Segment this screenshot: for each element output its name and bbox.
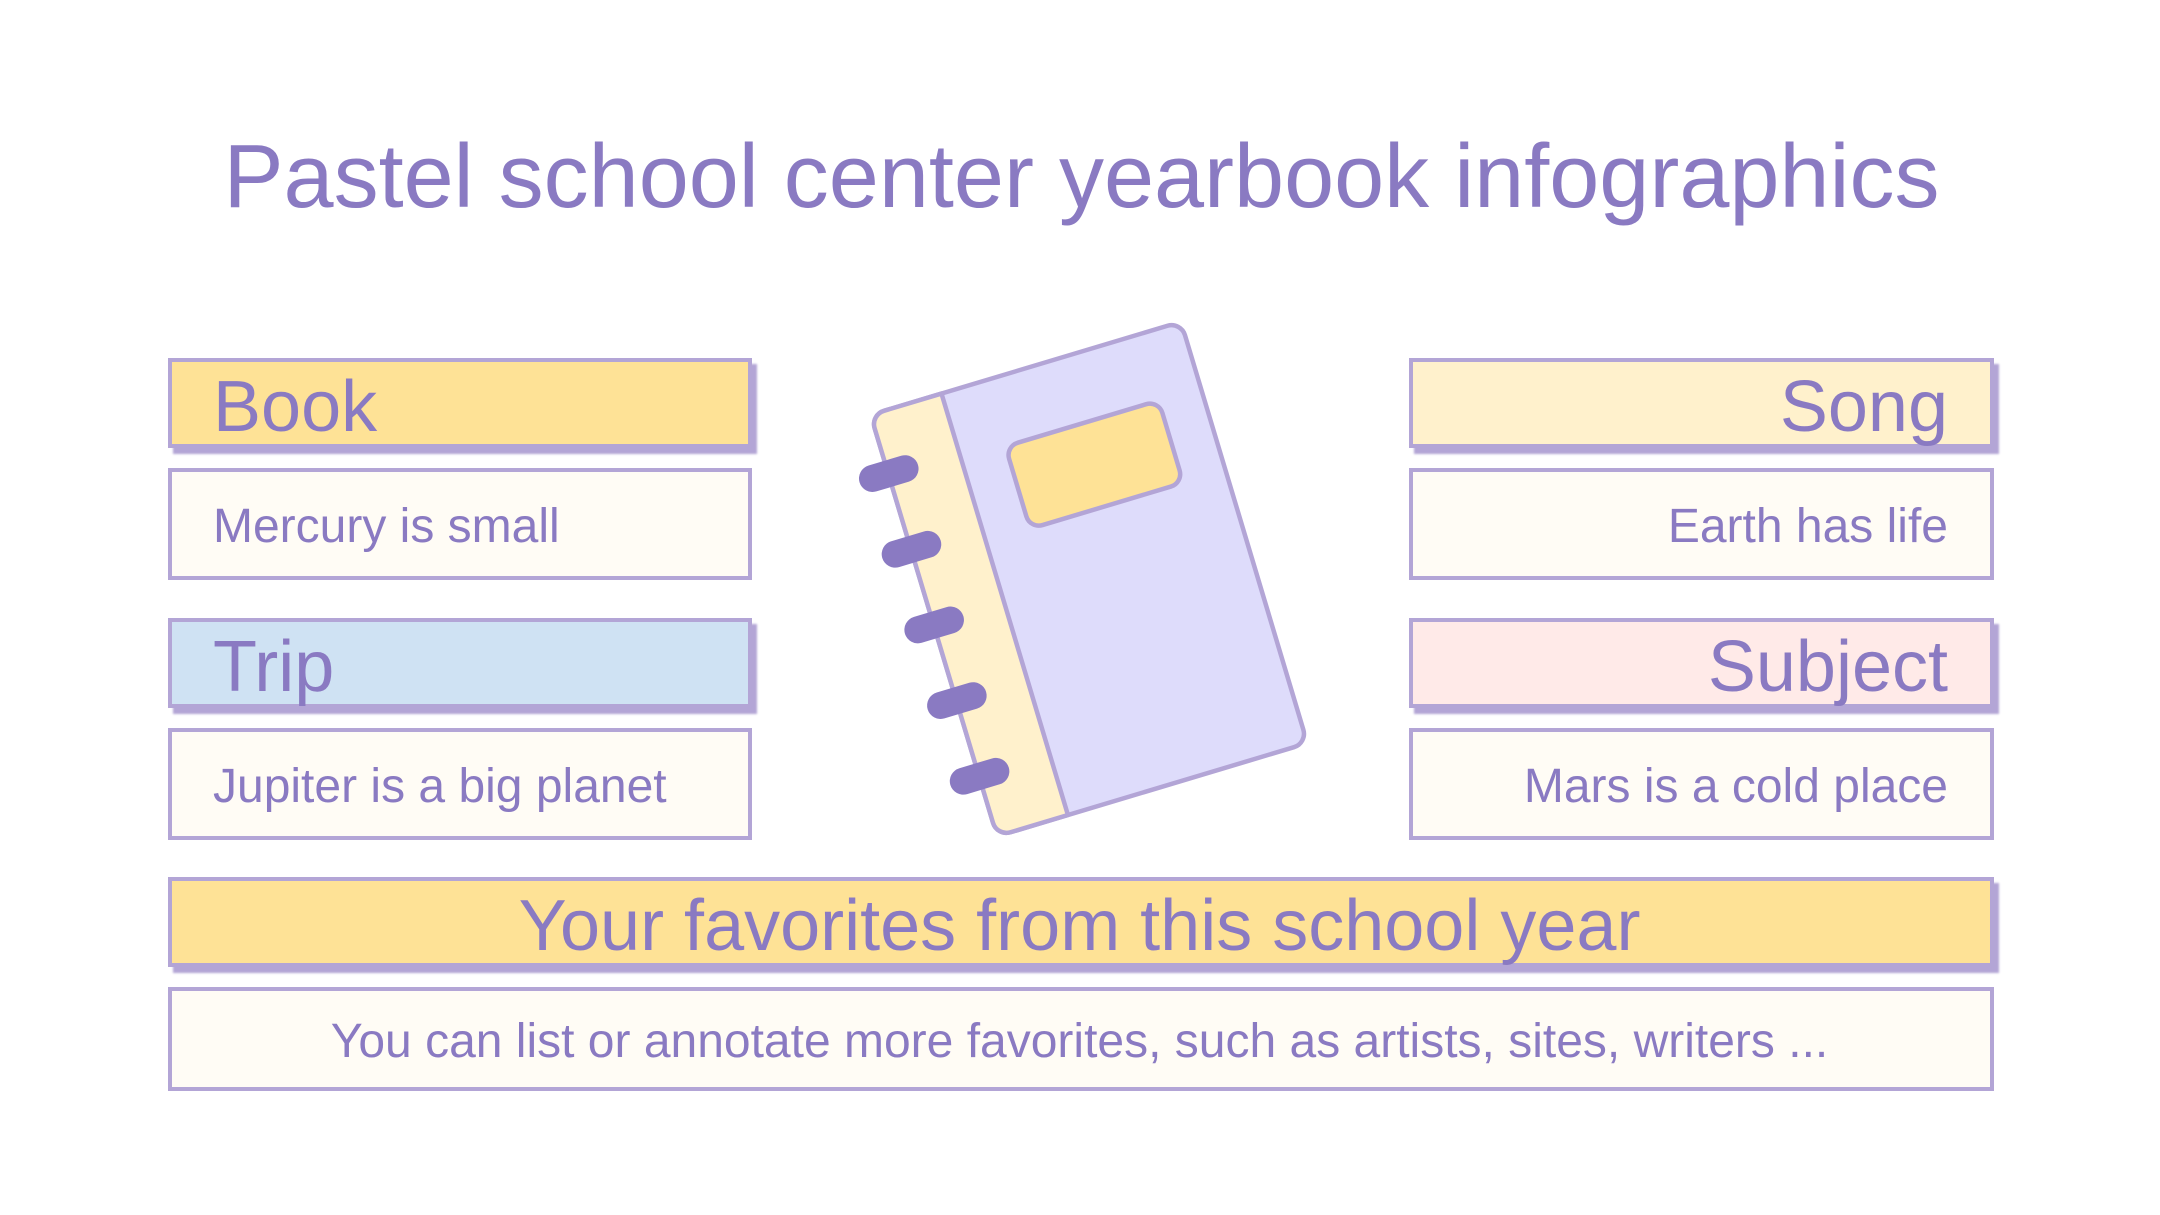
- panel: subject heading: Subject: [1708, 627, 1948, 707]
- panel: trip heading: [168, 618, 752, 708]
- panel: summary description: [168, 987, 1994, 1091]
- title: Pastel school center yearbook infographics: [224, 127, 1939, 227]
- panel: song description: Earth has life: [1668, 500, 1948, 552]
- panel: trip description: [168, 728, 752, 840]
- panel: trip heading: Trip: [213, 627, 334, 707]
- panel: book heading: Book: [213, 367, 377, 447]
- panel: subject description: [1409, 728, 1994, 840]
- panel: summary heading: Your favorites from this school year: [519, 886, 1640, 966]
- icon: notebook: [859, 322, 1306, 836]
- panel: summary description: You can list or annotate more favorites, such as artists, sites, writers ...: [331, 1014, 1828, 1068]
- panel: song heading: [1409, 358, 1994, 448]
- panel: subject description: Mars is a cold place: [1524, 760, 1948, 812]
- panel: book heading: [168, 358, 752, 448]
- panel: trip description: Jupiter is a big planet: [213, 760, 667, 812]
- panel: summary heading: [168, 877, 1994, 967]
- panel: song description: [1409, 468, 1994, 580]
- panel: subject heading: [1409, 618, 1994, 708]
- panel: book description: [168, 468, 752, 580]
- panel: song heading: Song: [1780, 367, 1948, 447]
- panel: book description: Mercury is small: [213, 500, 560, 552]
